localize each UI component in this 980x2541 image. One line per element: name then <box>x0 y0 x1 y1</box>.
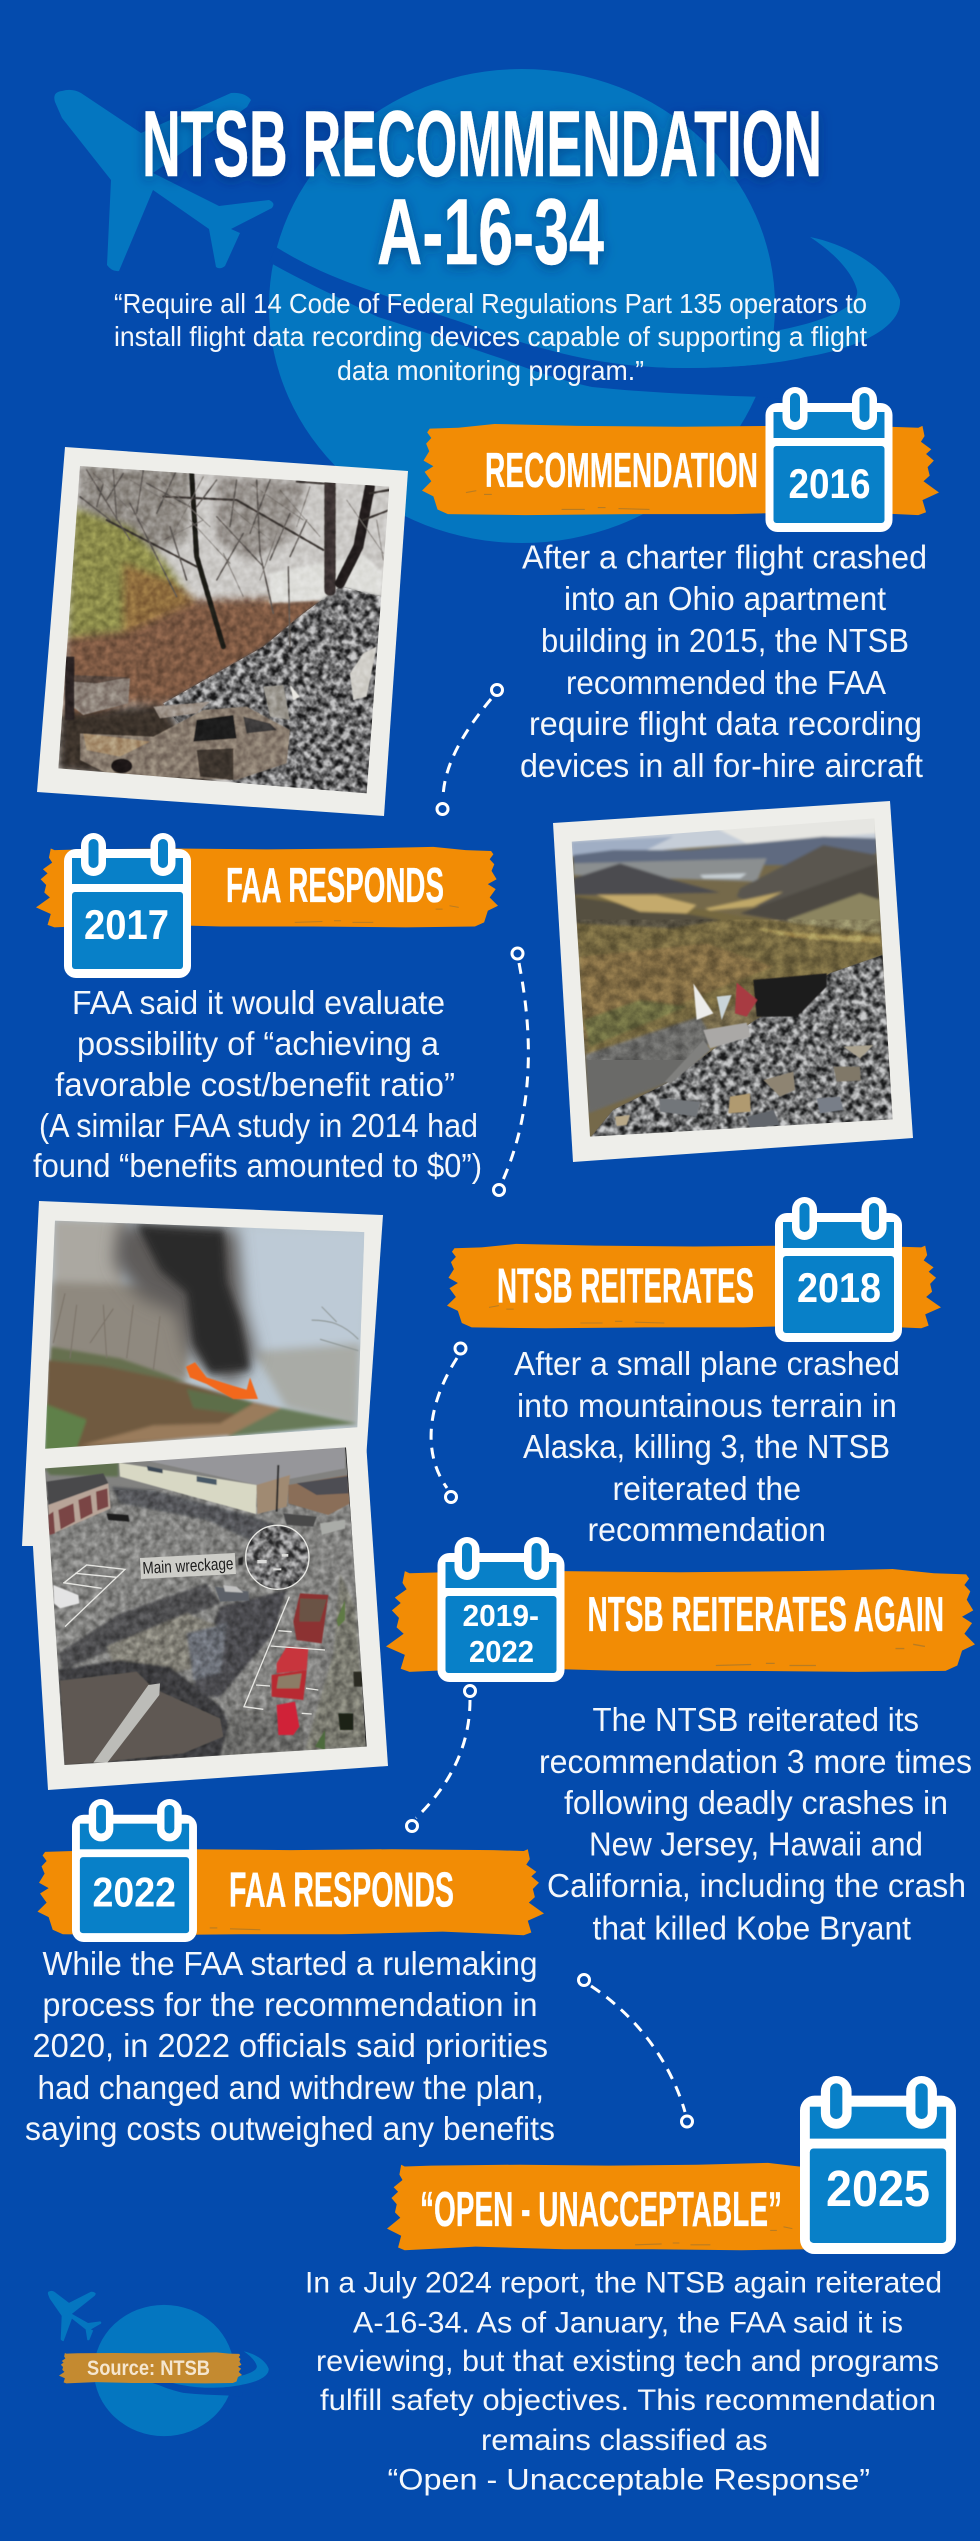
connector: dashed path 1 <box>437 684 502 814</box>
text block: 2025: A-16-34. As of January, the FAA said it is <box>353 2306 903 2340</box>
heading: NTSB reiterates: NTSB REITERATES <box>497 1260 754 1314</box>
icon: calendar 2022 <box>72 1799 197 1942</box>
recommendation quote <box>114 288 867 386</box>
text block: 2019-2022: recommendation 3 more times <box>539 1743 972 1780</box>
text block: 2018: After a small plane crashed <box>514 1345 900 1382</box>
text block: 2022 <box>25 1945 555 2147</box>
text block: 2017: found “benefits amounted to $0”) <box>33 1147 482 1184</box>
text block: 2025: reviewing, but that existing tech and programs <box>316 2345 939 2378</box>
text block: 2017: favorable cost/benefit ratio” <box>55 1066 455 1103</box>
text block: 2022: 2020, in 2022 officials said priorities <box>32 2027 548 2064</box>
text block: 2018: Alaska, killing 3, the NTSB <box>523 1428 890 1465</box>
source tag <box>59 2352 242 2383</box>
photo: Ohio crash wreckage <box>37 447 408 816</box>
connector: dashed path 2 <box>494 948 528 1196</box>
text block: 2025: “Open - Unacceptable Response” <box>388 2464 870 2496</box>
text block: 2025: fulfill safety objectives. This recommendation <box>320 2384 936 2417</box>
text block: 2017: FAA said it would evaluate <box>72 984 445 1021</box>
icon: calendar 2017 <box>64 833 191 978</box>
year 2018: 2018 <box>797 1264 881 1311</box>
photo: parking lot wreckage <box>27 1427 388 1790</box>
text block: 2025 <box>305 2266 942 2496</box>
text block: 2016: devices in all for-hire aircraft <box>520 747 923 784</box>
text block: 2022: process for the recommendation in <box>42 1986 538 2023</box>
text block: 2019-2022: New Jersey, Hawaii and <box>589 1826 923 1862</box>
title: A-16-34 <box>377 179 604 284</box>
text block: 2019-2022: following deadly crashes in <box>564 1784 948 1821</box>
text block: 2016: require flight data recording <box>529 705 922 742</box>
text block: 2018: into mountainous terrain in <box>517 1387 897 1424</box>
heading: FAA responds: FAA RESPONDS <box>229 1864 454 1918</box>
text block: 2017: possibility of “achieving a <box>77 1025 440 1062</box>
text block: 2022: While the FAA started a rulemaking <box>42 1945 538 1982</box>
icon: airplane behind title <box>54 90 273 271</box>
text block: 2016 <box>520 538 927 784</box>
text block: 2016: into an Ohio apartment <box>564 580 886 617</box>
icon: calendar 2016 <box>766 387 892 532</box>
photo: Kobe Bryant crash fire <box>22 1201 383 1546</box>
icon: small airplane logo <box>48 2291 101 2341</box>
icon: planet behind title <box>269 69 900 543</box>
section: recommendation 2016 header <box>422 387 939 532</box>
text block: 2019-2022: The NTSB reiterated its <box>592 1701 919 1738</box>
recommendation quote: install flight data recording devices capable of supporting a flight <box>114 321 867 352</box>
icon: calendar 2018 <box>775 1197 902 1342</box>
years 2019-2022: 2022 <box>469 1634 534 1669</box>
text block: 2018: reiterated the <box>612 1470 801 1507</box>
connector: dashed path 3 <box>431 1343 466 1502</box>
section: NTSB reiterates again 2019-2022 header <box>386 1537 975 1682</box>
icon: small planet logo <box>94 2305 269 2436</box>
text block: 2019-2022 <box>539 1701 972 1946</box>
text block: 2022: saying costs outweighed any benefits <box>25 2110 555 2147</box>
text block: 2017: (A similar FAA study in 2014 had <box>39 1107 478 1144</box>
icon: calendar 2019-2022 <box>438 1537 564 1682</box>
connector: dashed path 4 <box>406 1686 476 1832</box>
section: FAA responds 2017 header <box>36 833 498 978</box>
text block: 2019-2022: California, including the crash <box>547 1867 966 1904</box>
years 2019-2022: 2019- <box>462 1598 539 1633</box>
connector: dashed path 5 <box>578 1974 692 2127</box>
title <box>142 91 822 284</box>
label: main wreckage: Main wreckage <box>142 1554 234 1578</box>
text block: 2018: recommendation <box>588 1511 826 1548</box>
section: FAA responds 2022 header <box>38 1799 544 1942</box>
text block: 2016: After a charter flight crashed <box>522 538 927 576</box>
icon: calendar 2025 <box>800 2076 956 2254</box>
years 2019-2022 <box>462 1598 539 1669</box>
heading: recommendation: RECOMMENDATION <box>485 444 758 498</box>
source tag: Source: NTSB <box>87 2357 210 2380</box>
year 2017: 2017 <box>84 901 169 948</box>
section: NTSB reiterates 2018 header <box>447 1197 941 1342</box>
text block: 2019-2022: that killed Kobe Bryant <box>592 1910 911 1946</box>
photo: Alaska mountain crash <box>553 801 913 1162</box>
recommendation quote: data monitoring program.” <box>337 355 644 386</box>
year 2016: 2016 <box>788 460 870 507</box>
heading: FAA responds: FAA RESPONDS <box>226 859 444 913</box>
text block: 2016: building in 2015, the NTSB <box>541 622 909 659</box>
text block: 2025: In a July 2024 report, the NTSB again reiterated <box>305 2266 942 2300</box>
section: open unacceptable 2025 header <box>387 2076 956 2254</box>
text block: 2017 <box>33 984 482 1184</box>
recommendation quote: “Require all 14 Code of Federal Regulations Part 135 operators to <box>114 288 867 319</box>
text block: 2018 <box>514 1345 900 1548</box>
text block: 2016: recommended the FAA <box>566 664 886 701</box>
year 2022: 2022 <box>92 1868 176 1916</box>
year 2025: 2025 <box>826 2160 930 2217</box>
text block: 2022: had changed and withdrew the plan, <box>38 2069 544 2106</box>
text block: 2025: remains classified as <box>481 2424 768 2457</box>
